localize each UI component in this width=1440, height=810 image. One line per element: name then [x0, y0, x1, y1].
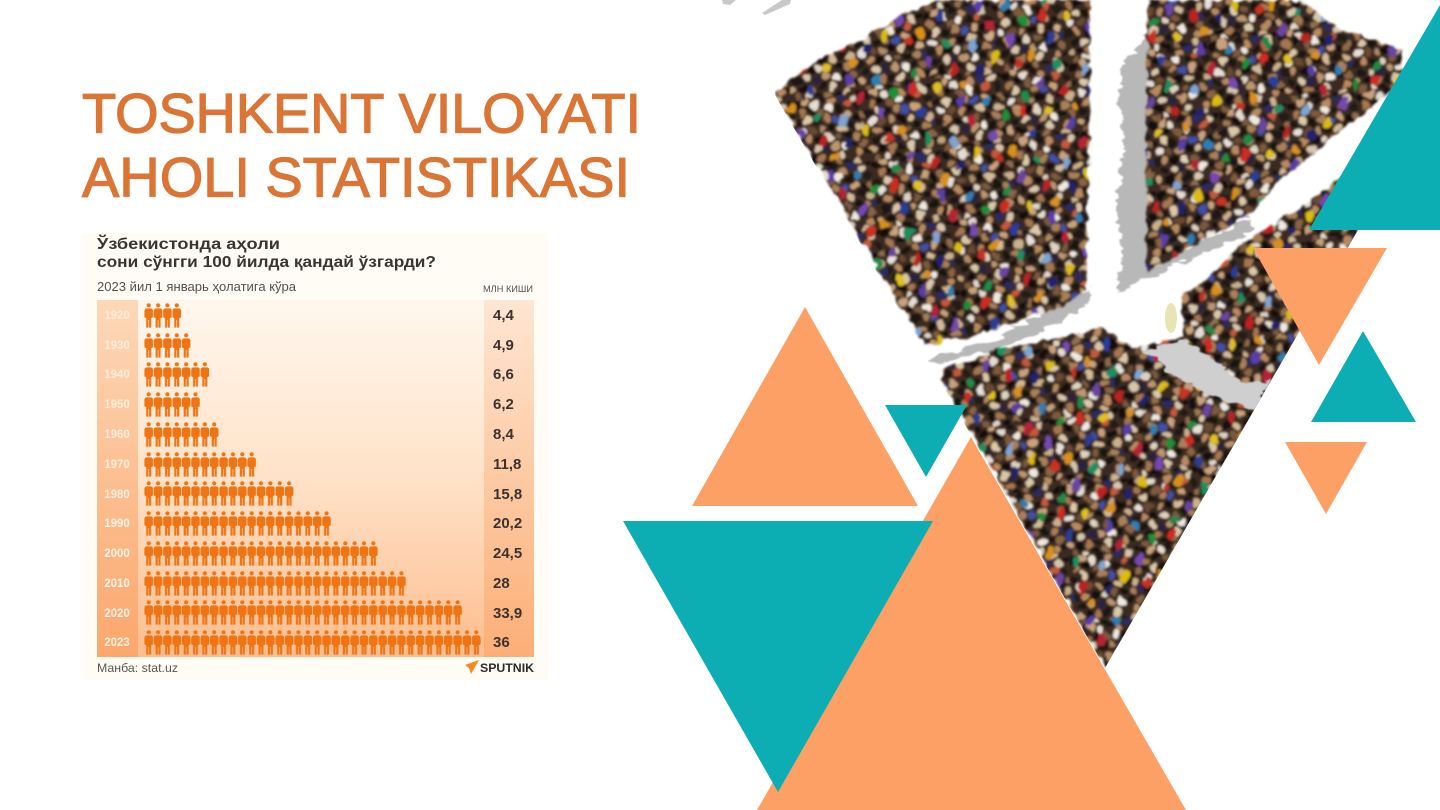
triangle: orange huge bottom [757, 437, 1186, 810]
triangle: teal right small [1311, 331, 1416, 422]
population values: 24,5 [493, 545, 522, 562]
population values: 8,4 [493, 426, 515, 443]
triangle: orange right small inverted [1285, 442, 1367, 514]
year labels: 1970 [104, 459, 130, 471]
photo smudge at top edge [722, 0, 791, 15]
chart heading [96, 235, 436, 271]
population values: 6,2 [493, 396, 514, 413]
year labels: 2023 [104, 637, 130, 649]
crowd wedge: bottom [942, 170, 1400, 668]
year labels: 2000 [104, 548, 130, 560]
population values: 20,2 [493, 515, 522, 532]
title: AHOLI STATISTIKASI [82, 146, 630, 208]
year labels: 2010 [104, 578, 130, 590]
year labels: 1920 [104, 310, 130, 322]
chart subtitle: 2023 йил 1 январь ҳолатига кўра [97, 280, 296, 294]
year labels: 1980 [104, 489, 130, 501]
year labels: 1960 [104, 429, 130, 441]
icon: sputnik logo: SPUTNIK [480, 661, 534, 675]
year labels: 1990 [104, 518, 130, 530]
pictogram rows: one figure per million people [144, 303, 481, 655]
population values: 33,9 [493, 605, 522, 622]
panel: population chart infographic [82, 233, 548, 680]
source: Манба: stat.uz [97, 661, 178, 675]
year labels: 1930 [104, 340, 130, 352]
population values: 36 [493, 634, 510, 651]
year labels: 1950 [104, 399, 130, 411]
triangle: orange left [692, 307, 918, 506]
crowd wedge: upper right [1146, 0, 1402, 273]
triangle: orange right inverted [1253, 248, 1387, 365]
chart heading: Ўзбекистонда аҳоли [96, 235, 280, 253]
triangle: teal small inverted [885, 405, 967, 477]
triangle: teal top right [1309, 5, 1440, 230]
chart heading: сони сўнгги 100 йилда қандай ўзгарди? [97, 254, 436, 271]
population values: 11,8 [493, 456, 521, 473]
year labels: 1940 [104, 369, 130, 381]
population values: 15,8 [493, 486, 522, 503]
population values: 6,6 [493, 366, 514, 383]
population values: 4,9 [493, 337, 514, 354]
year labels [104, 310, 130, 649]
lone figure in cream clothes [1165, 303, 1177, 333]
unit label: МЛН КИШИ [483, 284, 533, 295]
crowd wedge: upper left [775, 0, 1090, 346]
plot background [97, 300, 534, 657]
population values: 28 [493, 575, 510, 592]
year labels: 2020 [104, 608, 130, 620]
chart card background [82, 233, 548, 680]
title: TOSHKENT VILOYATI [82, 82, 641, 144]
title [82, 82, 641, 208]
population values [493, 307, 522, 651]
photo: crowd of people forming a wedge shape [775, 0, 1402, 668]
population values: 4,4 [493, 307, 515, 324]
crowd shadows on the ground [926, 30, 1252, 364]
triangle: teal big inverted [623, 521, 933, 792]
ground gap with shadows inside bottom crowd [1145, 340, 1270, 410]
